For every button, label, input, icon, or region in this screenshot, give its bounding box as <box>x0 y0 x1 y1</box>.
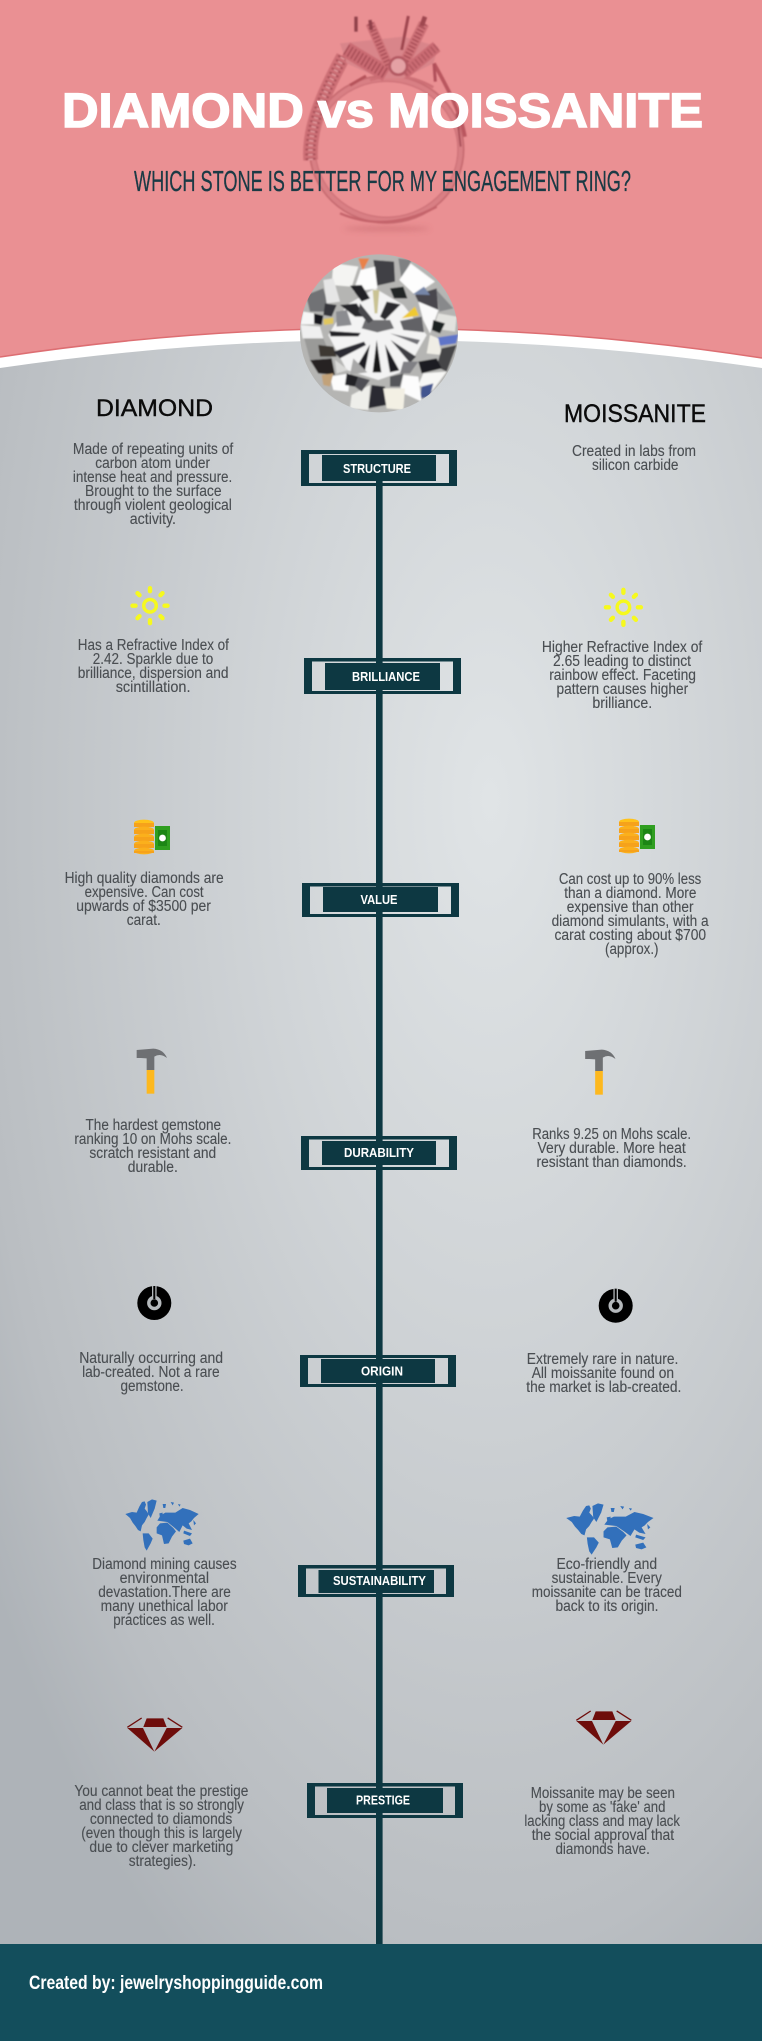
text: diamond brilliance: 2.42. Sparkle due to <box>93 651 213 668</box>
icon: sun left <box>132 588 168 623</box>
row: structure <box>73 441 696 528</box>
row: durability <box>74 1049 691 1176</box>
text: moissanite brilliance: 2.65 leading to distinct <box>553 653 692 670</box>
text: moissanite sustainability: back to its origin. <box>556 1598 658 1615</box>
text: moissanite sustainability <box>532 1556 682 1615</box>
text: moissanite durability: Very durable. More heat <box>538 1140 686 1157</box>
icon: origin mark left <box>137 1286 171 1320</box>
icon: coins and cash right <box>619 819 655 853</box>
label: origin: ORIGIN <box>361 1364 403 1378</box>
text: diamond value: upwards of $3500 per <box>76 898 211 915</box>
footer band <box>0 1944 762 2041</box>
text: diamond prestige: You cannot beat the prestige <box>74 1783 248 1800</box>
text: diamond prestige: (even though this is largely <box>81 1825 242 1842</box>
text: diamond prestige: and class that is so strongly <box>79 1797 244 1814</box>
text: moissanite value: (approx.) <box>605 941 658 958</box>
text: diamond structure: carbon atom under <box>95 455 210 472</box>
text: diamond origin: lab-created. Not a rare <box>82 1364 220 1381</box>
icon: origin mark right <box>599 1289 633 1323</box>
text: diamond sustainability: Diamond mining causes <box>92 1556 237 1573</box>
column heading: diamond: DIAMOND <box>96 395 213 422</box>
text: moissanite value: Can cost up to 90% less <box>559 871 702 888</box>
text: moissanite prestige <box>524 1785 680 1858</box>
text: diamond prestige: connected to diamonds <box>90 1811 233 1828</box>
text: moissanite origin: All moissanite found on <box>532 1365 674 1382</box>
text: moissanite prestige: diamonds have. <box>556 1841 650 1858</box>
row: brilliance <box>78 588 703 712</box>
text: moissanite value: carat costing about $700 <box>554 927 706 944</box>
text: diamond structure: intense heat and pressure. <box>73 469 232 486</box>
row: sustainability <box>92 1499 682 1629</box>
ring shadow <box>343 226 430 231</box>
text: diamond brilliance: scintillation. <box>116 679 190 696</box>
text: diamond value: High quality diamonds are <box>65 870 224 887</box>
text: diamond durability: durable. <box>128 1159 178 1176</box>
row: origin <box>79 1286 681 1396</box>
label: value: VALUE <box>360 892 398 907</box>
ring crown <box>340 16 438 78</box>
text: diamond value: expensive. Can cost <box>85 884 204 901</box>
text: diamond prestige <box>74 1783 248 1870</box>
text: diamond structure: Made of repeating units of <box>73 441 234 458</box>
text: diamond structure: Brought to the surface <box>85 483 222 500</box>
text: diamond structure: activity. <box>130 511 176 528</box>
row: value <box>65 819 709 958</box>
text: moissanite brilliance: Higher Refractive Index of <box>542 639 703 656</box>
text: diamond origin: Naturally occurring and <box>79 1350 223 1367</box>
text: moissanite sustainability: moissanite can be traced <box>532 1584 682 1601</box>
text: diamond durability: scratch resistant and <box>89 1145 216 1162</box>
text: diamond sustainability <box>92 1556 237 1629</box>
text: diamond sustainability: practices as well. <box>113 1612 215 1629</box>
text: diamond prestige: strategies). <box>129 1853 196 1870</box>
text: moissanite prestige: the social approval that <box>532 1827 675 1844</box>
text: diamond brilliance: Has a Refractive Index of <box>78 637 229 654</box>
text: moissanite durability: resistant than diamonds. <box>536 1154 687 1171</box>
title: DIAMOND vs MOISSANITE <box>62 85 703 138</box>
label: sustainability: SUSTAINABILITY <box>333 1573 426 1588</box>
text: diamond durability: ranking 10 on Mohs scale. <box>74 1131 231 1148</box>
text: diamond structure <box>73 441 234 528</box>
text: diamond durability <box>74 1117 231 1176</box>
text: diamond prestige: due to clever marketing <box>89 1839 233 1856</box>
label: value <box>302 883 459 917</box>
text: moissanite structure <box>572 443 696 474</box>
text: diamond sustainability: devastation.There are <box>98 1584 231 1601</box>
text: moissanite brilliance: pattern causes higher <box>556 681 688 698</box>
text: diamond origin <box>79 1350 223 1395</box>
text: moissanite durability: Ranks 9.25 on Mohs scale. <box>532 1126 691 1143</box>
label: durability <box>301 1136 457 1170</box>
pink header panel <box>0 0 762 358</box>
label: structure: STRUCTURE <box>343 461 411 476</box>
text: moissanite sustainability: Eco-friendly and <box>556 1556 657 1573</box>
icon: red gem left <box>127 1718 182 1752</box>
white curved band <box>0 328 762 368</box>
icon: world map left <box>125 1499 199 1551</box>
icon: coins and cash left <box>134 820 170 854</box>
label: structure <box>301 450 457 486</box>
illustration: engagement ring <box>310 16 465 231</box>
column heading: moissanite: MOISSANITE <box>564 400 706 428</box>
text: moissanite sustainability: sustainable. Every <box>552 1570 662 1587</box>
label: origin <box>300 1355 456 1387</box>
row: prestige <box>74 1711 680 1870</box>
text: diamond brilliance: brilliance, dispersion and <box>78 665 228 682</box>
text: diamond value: carat. <box>127 912 161 929</box>
timeline vertical line <box>376 481 383 1944</box>
text: moissanite value <box>552 871 709 958</box>
label: sustainability <box>298 1565 454 1597</box>
text: moissanite origin <box>526 1351 681 1396</box>
text: diamond brilliance <box>78 637 229 696</box>
text: diamond value <box>65 870 224 929</box>
text: moissanite value: diamond simulants, with a <box>552 913 709 930</box>
text: moissanite brilliance <box>542 639 703 712</box>
text: moissanite origin: the market is lab-created. <box>526 1379 681 1396</box>
text: diamond structure: through violent geological <box>74 497 232 514</box>
label: durability: DURABILITY <box>344 1145 414 1160</box>
text: moissanite brilliance: brilliance. <box>592 695 652 712</box>
text: diamond durability: The hardest gemstone <box>86 1117 221 1134</box>
text: moissanite structure: Created in labs from <box>572 443 696 460</box>
icon: hammer right <box>585 1050 615 1095</box>
label: brilliance <box>304 658 461 694</box>
text: moissanite structure: silicon carbide <box>592 457 678 474</box>
text: diamond sustainability: environmental <box>120 1570 209 1587</box>
label: brilliance: BRILLIANCE <box>352 669 420 684</box>
icon: sun right <box>606 590 641 625</box>
text: moissanite brilliance: rainbow effect. Faceting <box>549 667 696 684</box>
text: diamond origin: gemstone. <box>120 1378 184 1395</box>
text: moissanite prestige: by some as 'fake' and <box>539 1799 665 1816</box>
label: prestige <box>307 1783 463 1818</box>
text: moissanite prestige: Moissanite may be seen <box>531 1785 675 1802</box>
ring band <box>310 57 465 223</box>
text: diamond sustainability: many unethical labor <box>101 1598 228 1615</box>
text: moissanite origin: Extremely rare in nature. <box>527 1351 678 1368</box>
footer credit: Created by: jewelryshoppingguide.com <box>29 1973 323 1994</box>
icon: hammer left <box>137 1049 167 1094</box>
illustration: round brilliant diamond <box>297 252 463 418</box>
label: prestige: PRESTIGE <box>356 1792 410 1808</box>
icon: world map right <box>566 1503 654 1555</box>
text: moissanite prestige: lacking class and may lack <box>524 1813 680 1830</box>
icon: red gem right <box>576 1711 631 1745</box>
text: moissanite durability <box>532 1126 691 1171</box>
text: moissanite value: than a diamond. More <box>564 885 696 902</box>
text: moissanite value: expensive than other <box>567 899 694 916</box>
